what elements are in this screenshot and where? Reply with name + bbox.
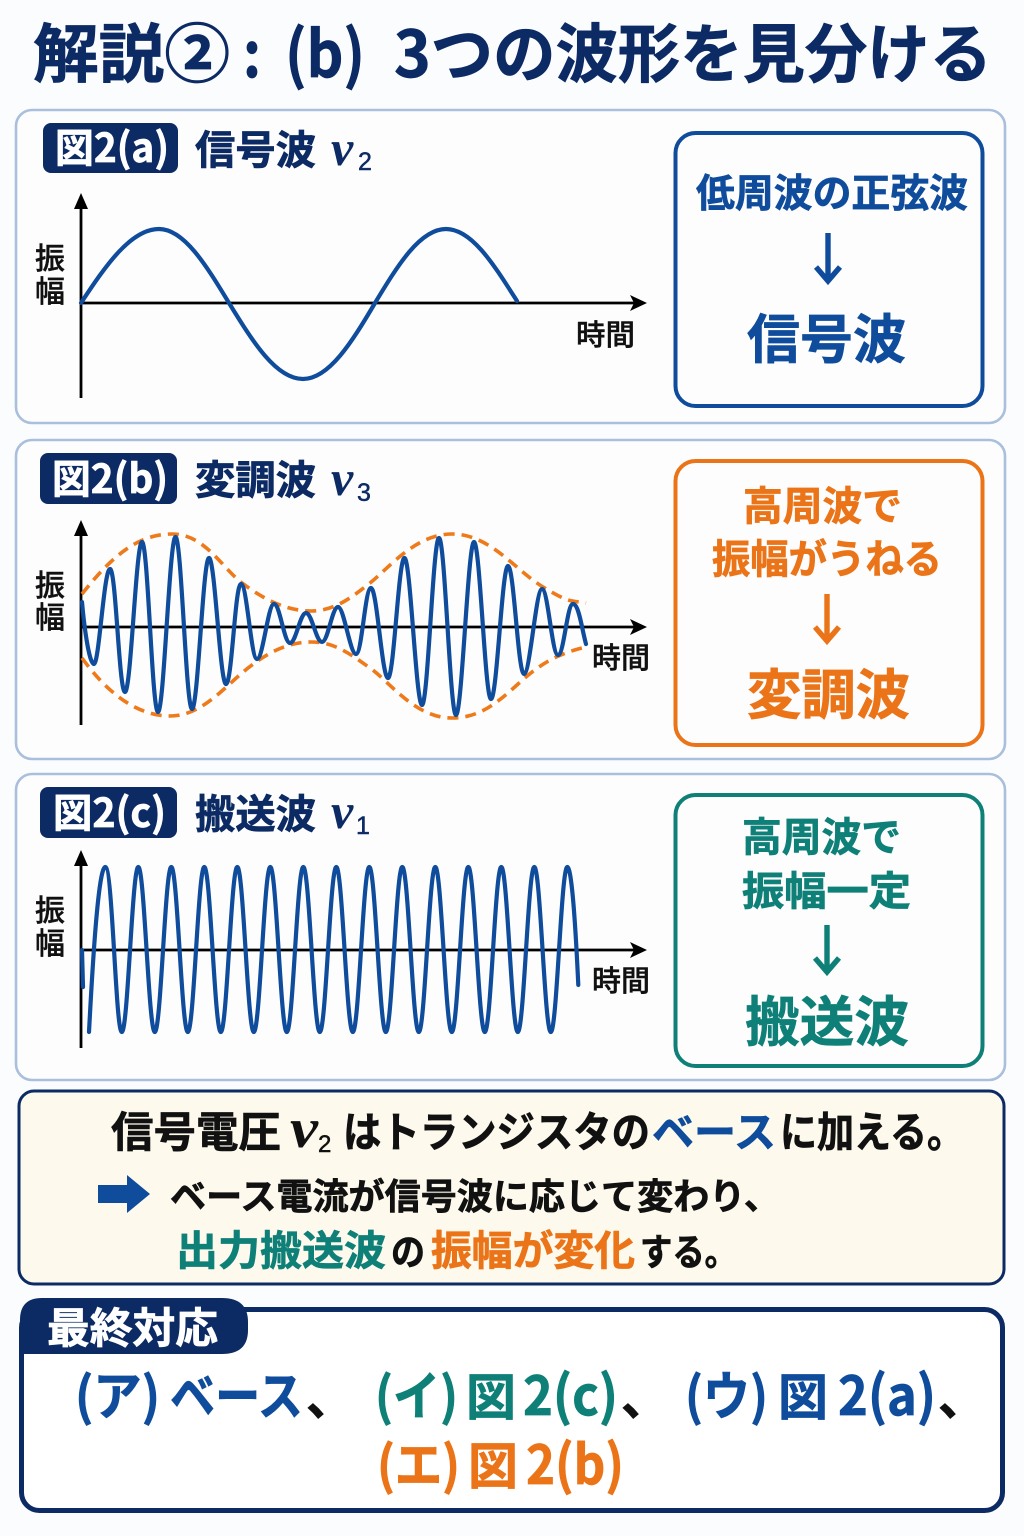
answer line 1: 、	[306, 1359, 354, 1429]
panel: signal wave	[16, 110, 1005, 423]
box: high frequency constant amplitude to carrier wave: 搬送波	[745, 978, 909, 1057]
tab: final correspondence: 最終対応	[47, 1295, 218, 1356]
axis label: amplitude: 振	[35, 234, 65, 278]
chart axes	[74, 193, 647, 398]
envelope dashed curves	[82, 534, 586, 718]
axis label: time: 時間	[592, 958, 650, 1000]
chart axes	[74, 850, 647, 1048]
answer line 2	[377, 1421, 624, 1500]
sentence: output carrier amplitude changes	[176, 1217, 737, 1277]
title: 3つの波形を見分ける	[394, 4, 992, 96]
axis label: amplitude: 幅	[35, 593, 65, 637]
heading: carrier wave	[195, 782, 370, 840]
heading: carrier wave: 搬送波	[195, 782, 316, 840]
heading: carrier wave: v	[331, 783, 354, 839]
heading: modulated wave	[195, 448, 371, 507]
arrow	[816, 233, 840, 282]
answer line 1: 2(a)	[838, 1352, 936, 1431]
axis label: time: 時間	[576, 312, 635, 354]
answer line 1: (イ)	[375, 1355, 458, 1430]
box: low frequency sine to signal wave	[676, 133, 982, 406]
panel: explanation	[19, 1091, 1004, 1284]
heading: signal wave: 信号波	[195, 118, 316, 176]
answer line 1	[75, 1352, 986, 1431]
box: high frequency varying amplitude to modulated wave: 振幅がうねる	[712, 527, 942, 585]
answer line 1: 2(c)	[523, 1352, 618, 1431]
sentence: signal voltage applied to base	[111, 1098, 964, 1160]
chart axes	[74, 520, 647, 725]
answer line 1: 図	[466, 1358, 516, 1430]
heading: signal wave	[195, 118, 372, 176]
sentence: signal voltage applied to base: v	[290, 1098, 319, 1160]
arrow	[815, 594, 839, 642]
box: low frequency sine to signal wave: 低周波の正弦波	[696, 163, 968, 219]
axis label: amplitude: 振	[35, 886, 65, 930]
heading: modulated wave: 3	[357, 479, 371, 507]
tag: figure 2(c): 図2(c)	[53, 781, 166, 839]
answer line 1: 図	[778, 1358, 828, 1430]
answer line 1: (ウ)	[685, 1355, 768, 1430]
tag: figure 2(b): 図2(b)	[52, 447, 168, 505]
axis label: amplitude	[35, 561, 65, 637]
sentence: output carrier amplitude changes: の	[391, 1222, 425, 1276]
axis label: amplitude: 幅	[35, 267, 65, 311]
heading: modulated wave: 変調波	[195, 448, 316, 506]
answer line 1: 、	[621, 1359, 669, 1429]
axis label: time: 時間	[592, 635, 650, 677]
box: high frequency varying amplitude to modulated wave: 変調波	[747, 651, 910, 730]
answer line 2: (エ)	[377, 1424, 460, 1499]
sentence: signal voltage applied to base: はトランジスタの	[343, 1099, 650, 1160]
panel: modulated wave	[16, 440, 1005, 759]
sentence: signal voltage applied to base: 信号電圧	[111, 1099, 281, 1160]
box: high frequency varying amplitude to modulated wave: 高周波で	[743, 474, 902, 532]
panel: carrier wave	[16, 774, 1005, 1080]
axis label: amplitude	[35, 234, 65, 311]
title: (b)	[285, 4, 365, 96]
box: low frequency sine to signal wave: 信号波	[747, 298, 906, 374]
panel: final answers	[20, 1295, 1002, 1510]
answer line 1: (ア)	[75, 1355, 160, 1430]
title: 解説②	[33, 4, 230, 96]
answer line 1: 、	[938, 1359, 986, 1429]
icon: right arrow	[98, 1175, 150, 1213]
sentence: signal voltage applied to base: ベース	[652, 1099, 776, 1160]
modulated wave	[82, 537, 586, 715]
sentence: output carrier amplitude changes: 振幅が変化	[431, 1217, 635, 1277]
sentence: base current changes: ベース電流が信号波に応じて変わり、	[170, 1168, 780, 1220]
sentence: output carrier amplitude changes: する。	[640, 1222, 737, 1276]
answer line 2: 2(b)	[526, 1421, 624, 1500]
box: high frequency constant amplitude to carrier wave: 高周波で	[742, 805, 901, 863]
heading: carrier wave: 1	[356, 812, 370, 840]
sentence: output carrier amplitude changes: 出力搬送波	[176, 1217, 386, 1277]
box: high frequency varying amplitude to modulated wave	[676, 461, 982, 745]
tag: figure 2(a): 図2(a)	[55, 116, 169, 174]
sentence: signal voltage applied to base: 2	[318, 1131, 331, 1158]
box: high frequency constant amplitude to carrier wave: 振幅一定	[742, 859, 911, 917]
axis label: amplitude: 幅	[35, 919, 65, 963]
title	[33, 4, 992, 96]
heading: signal wave: 2	[358, 148, 372, 176]
heading: modulated wave: v	[331, 450, 354, 506]
axis label: amplitude	[35, 886, 65, 963]
box: high frequency constant amplitude to carrier wave	[676, 795, 982, 1066]
axis label: amplitude: 振	[35, 561, 65, 605]
title: :	[243, 4, 261, 96]
carrier wave	[82, 867, 578, 1032]
heading: signal wave: v	[331, 120, 354, 176]
answer line 1: ベース	[170, 1355, 303, 1430]
sentence: signal voltage applied to base: に加える。	[780, 1099, 964, 1160]
answer line 2: 図	[468, 1427, 518, 1499]
signal sine wave	[81, 229, 517, 379]
arrow	[815, 925, 839, 973]
